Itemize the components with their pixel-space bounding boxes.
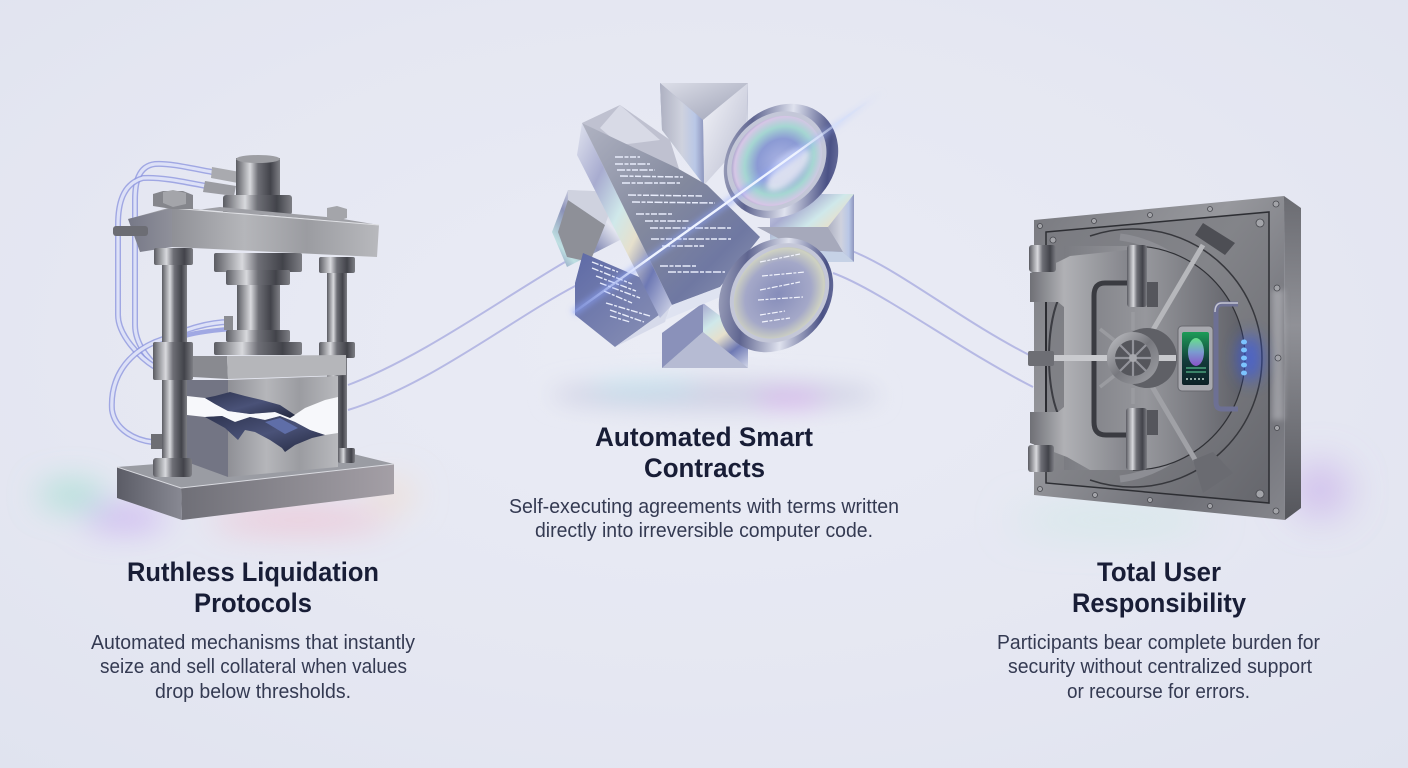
icon: crystal prisms and lenses — [550, 80, 885, 410]
press ground glow — [38, 477, 416, 532]
heading: Responsibility — [1072, 588, 1246, 618]
description: security without centralized support — [1008, 656, 1312, 678]
fingerprint scanner — [1178, 326, 1213, 391]
left column — [153, 248, 193, 477]
heading: Total User — [1097, 557, 1221, 587]
rivets — [1038, 201, 1281, 514]
vault ground glow — [1010, 464, 1348, 529]
icon: hydraulic press — [38, 155, 416, 532]
text: ruthless liquidation protocols — [91, 557, 415, 703]
top lens — [700, 80, 862, 242]
vault body — [1034, 196, 1301, 520]
locking bars — [1028, 223, 1235, 493]
left curved lever — [1046, 300, 1058, 414]
hydraulic tubes — [112, 164, 230, 442]
description: drop below thresholds. — [155, 681, 351, 703]
left gem — [552, 190, 620, 267]
top plate — [113, 190, 379, 257]
top prism — [660, 83, 748, 185]
heading — [1072, 557, 1246, 618]
heading — [595, 422, 813, 483]
handle — [1215, 303, 1238, 409]
icon: bank vault — [1010, 196, 1348, 529]
lower-left code gem — [575, 253, 670, 347]
tube fittings — [151, 167, 240, 449]
crystal shadow — [550, 380, 880, 410]
light beam — [573, 90, 885, 313]
broken metal block — [187, 376, 338, 477]
heading: Contracts — [644, 453, 765, 483]
block slab — [193, 355, 346, 379]
hinges — [1028, 245, 1158, 472]
heading: Protocols — [194, 588, 312, 618]
heading — [127, 557, 379, 618]
door frame — [1030, 250, 1127, 470]
description: Participants bear complete burden for — [997, 632, 1320, 654]
text: automated smart contracts — [509, 422, 899, 542]
text: total user responsibility — [997, 557, 1320, 703]
status lights — [1238, 334, 1262, 382]
description: Self-executing agreements with terms written — [509, 496, 899, 518]
description — [91, 632, 415, 703]
description — [997, 632, 1320, 703]
description: directly into irreversible computer code. — [535, 520, 873, 542]
lower lens — [695, 214, 857, 376]
bottom prism — [662, 303, 748, 368]
large code tablet — [577, 105, 760, 320]
base plate — [117, 450, 394, 520]
heading: Automated Smart — [595, 422, 813, 452]
description: Automated mechanisms that instantly — [91, 632, 415, 654]
connecting wires — [348, 251, 1033, 410]
heading: Ruthless Liquidation — [127, 557, 379, 587]
circular door — [1064, 229, 1262, 487]
right prism — [757, 194, 854, 262]
lens code lines — [758, 254, 805, 322]
central ram — [214, 155, 302, 355]
wheel — [1100, 312, 1177, 404]
crack — [187, 392, 338, 452]
right column — [319, 257, 355, 463]
description — [509, 496, 899, 542]
description: or recourse for errors. — [1067, 681, 1250, 703]
description: seize and sell collateral when values — [100, 656, 407, 678]
